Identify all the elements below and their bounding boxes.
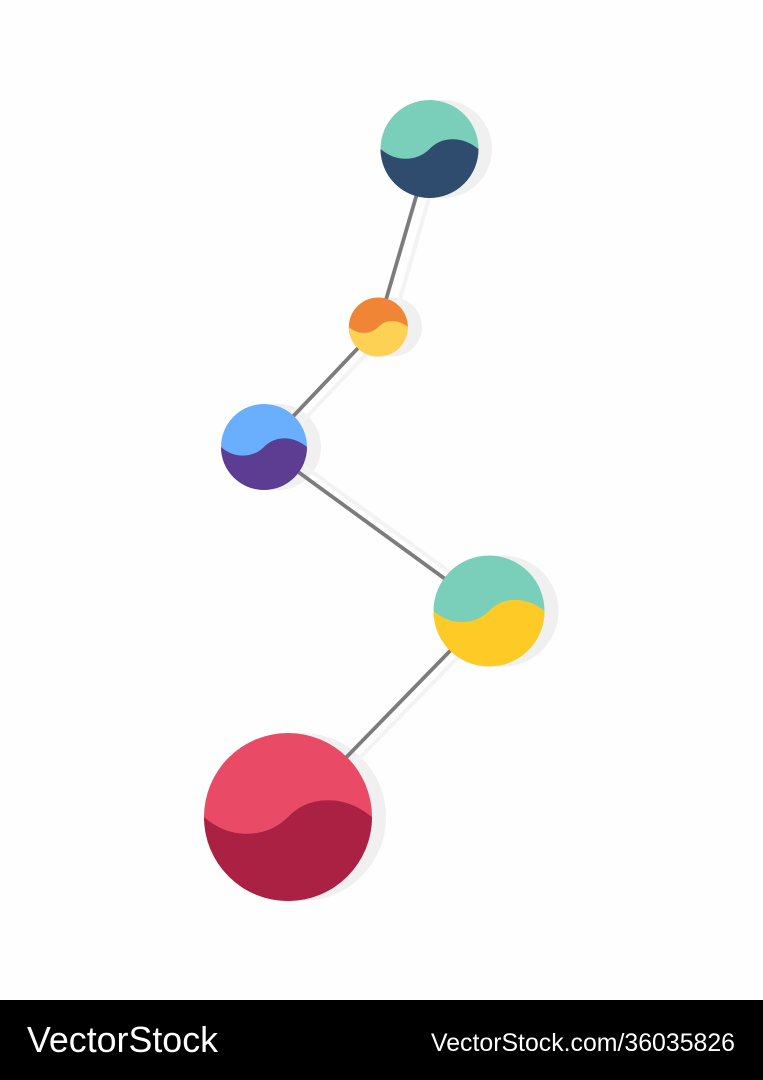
circle shadows — [218, 100, 558, 901]
node 3: blue and purple circle — [221, 404, 307, 490]
connector shadows — [278, 149, 503, 817]
node 1: teal and navy circle — [380, 100, 478, 198]
connector lines — [264, 149, 489, 817]
footer logo text: VectorStock — [27, 1019, 219, 1060]
footer bar — [0, 1000, 763, 1080]
footer image id text: VectorStock.com/36035826 — [431, 1029, 735, 1057]
node 4: teal and yellow circle — [434, 556, 544, 666]
node 2: orange and yellow circle — [349, 298, 408, 356]
node 5: red and crimson circle — [204, 733, 372, 901]
